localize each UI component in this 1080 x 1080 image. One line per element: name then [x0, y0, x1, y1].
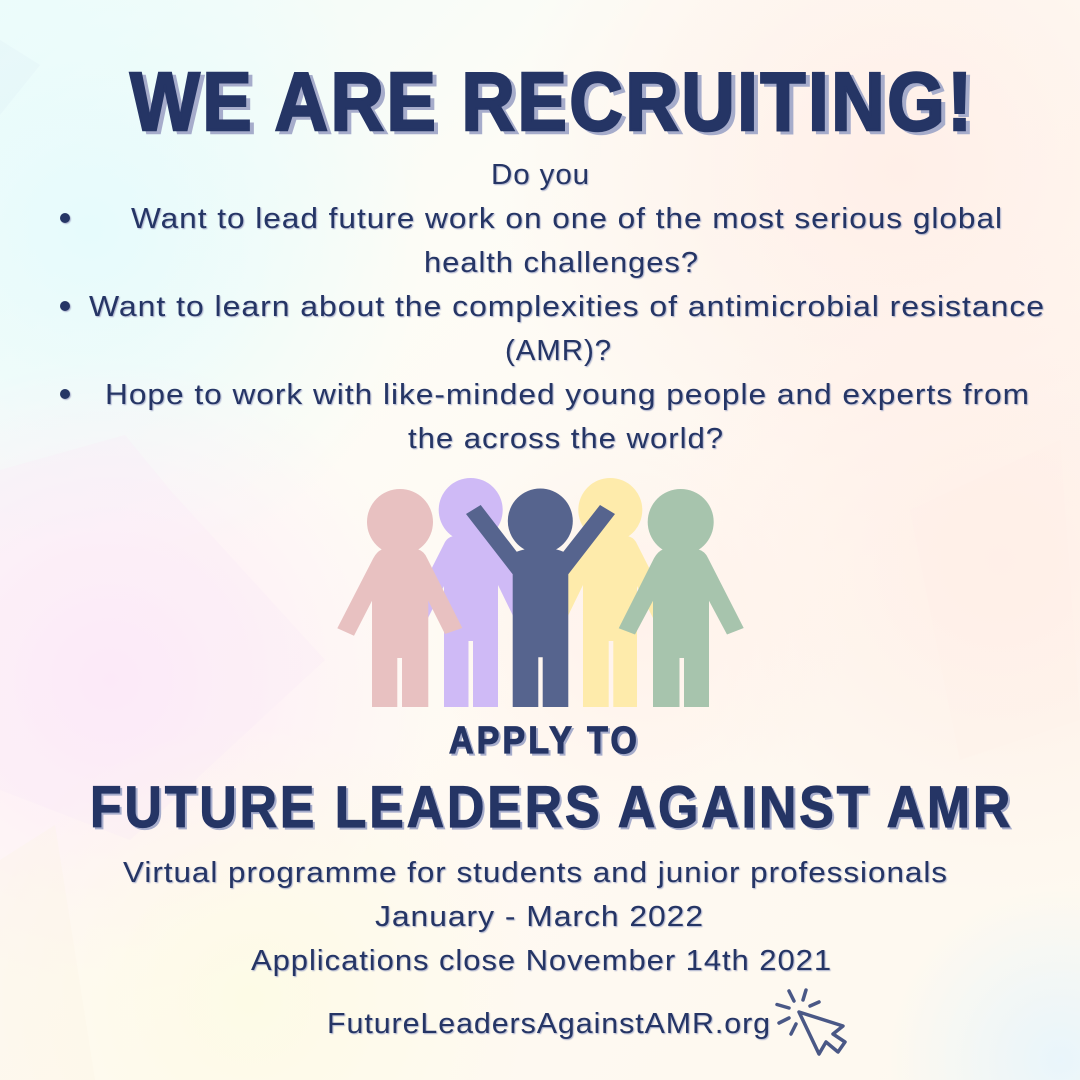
bullet 3: Hope to work with like-minded young people and experts from — [105, 379, 1030, 411]
person: purple — [408, 478, 534, 707]
intro line: Do you — [491, 159, 590, 191]
bullet 1 — [60, 203, 1003, 279]
question list — [60, 159, 1045, 455]
person: blue, arms raised — [466, 488, 615, 707]
icon: group of five people — [337, 478, 744, 707]
apply to heading: APPLY TO — [449, 718, 637, 761]
bullet 3 — [60, 379, 1030, 455]
programme description: Virtual programme for students and junior professionals — [123, 857, 948, 889]
title: WE ARE RECRUITING! — [130, 55, 972, 148]
bullet 1: health challenges? — [424, 247, 699, 279]
person: yellow — [547, 478, 673, 707]
bullet 2: (AMR)? — [505, 335, 612, 367]
icon: clicking cursor — [777, 990, 845, 1054]
dates: January - March 2022 — [375, 901, 704, 933]
programme details — [123, 857, 948, 977]
person: green — [619, 489, 744, 707]
deadline: Applications close November 14th 2021 — [251, 945, 832, 977]
bullet 2: Want to learn about the complexities of antimicrobial resistance — [89, 291, 1045, 323]
programme name heading: FUTURE LEADERS AGAINST AMR — [90, 774, 1010, 840]
website link: FutureLeadersAgainstAMR.org — [327, 1008, 771, 1040]
bullet 1: Want to lead future work on one of the most serious global — [131, 203, 1003, 235]
bullet 2 — [60, 291, 1045, 367]
person: pink — [337, 489, 462, 707]
bullet 3: the across the world? — [408, 423, 724, 455]
